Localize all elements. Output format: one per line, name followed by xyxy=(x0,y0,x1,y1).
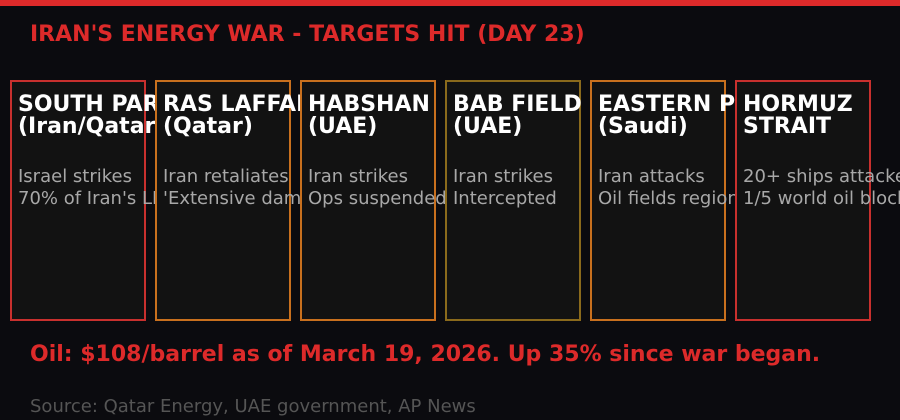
card: Ras Laffan: RAS LAFFAN xyxy=(163,92,314,117)
card: Bab Field: BAB FIELD xyxy=(453,92,582,117)
title: IRAN'S ENERGY WAR - TARGETS HIT (DAY 23) xyxy=(30,22,585,47)
card: Habshan: HABSHAN xyxy=(308,92,430,117)
card: Habshan: Ops suspended xyxy=(308,188,447,209)
card: Bab Field xyxy=(446,81,582,320)
top bar xyxy=(0,0,900,6)
card: Habshan: Iran strikes xyxy=(308,166,408,187)
card: Hormuz Strait: STRAIT xyxy=(743,114,831,139)
card: South Pars xyxy=(11,81,179,320)
oil price callout: Oil: $108/barrel as of March 19, 2026. Up 35% since war began. xyxy=(30,342,820,367)
card: Ras Laffan: (Qatar) xyxy=(163,114,253,139)
card: South Pars: SOUTH PARS xyxy=(18,92,175,117)
card: Ras Laffan xyxy=(156,81,340,320)
card: Eastern Province: Iran attacks xyxy=(598,166,705,187)
card: Eastern Province xyxy=(591,81,845,320)
source: Source: Qatar Energy, UAE government, AP News xyxy=(30,396,476,417)
card: Habshan: (UAE) xyxy=(308,114,377,139)
card: South Pars: (Iran/Qatar) xyxy=(18,114,165,139)
card: Eastern Province: (Saudi) xyxy=(598,114,688,139)
card: Eastern Province: EASTERN PROVINCE xyxy=(598,92,845,117)
card: South Pars: 70% of Iran's LNG xyxy=(18,188,179,209)
card: Hormuz Strait: HORMUZ xyxy=(743,92,853,117)
card: Ras Laffan: Iran retaliates xyxy=(163,166,289,187)
card: Hormuz Strait xyxy=(736,81,900,320)
card: Bab Field: (UAE) xyxy=(453,114,522,139)
card: Bab Field: Iran strikes xyxy=(453,166,553,187)
card: Ras Laffan: 'Extensive damage' xyxy=(163,188,340,209)
card: Habshan xyxy=(301,81,447,320)
card: South Pars: Israel strikes xyxy=(18,166,132,187)
card: Eastern Province: Oil fields region xyxy=(598,188,739,209)
card: Bab Field: Intercepted xyxy=(453,188,557,209)
